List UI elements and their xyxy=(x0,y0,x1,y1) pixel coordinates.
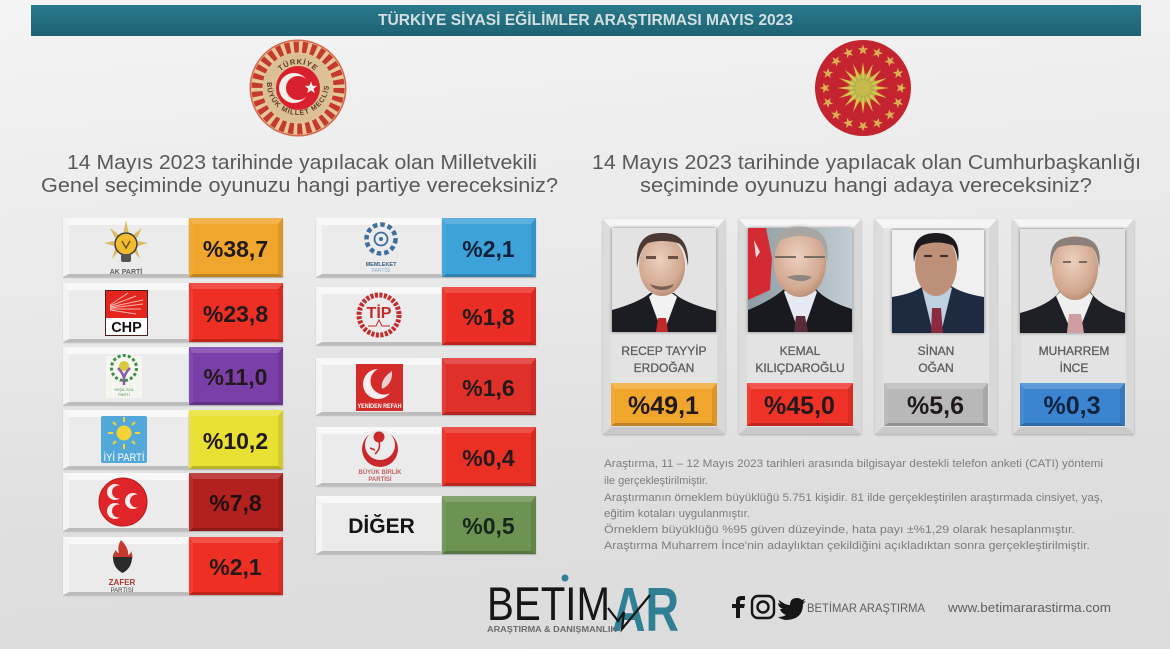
icon: Memleket Partisi logo: MEMLEKET xyxy=(366,262,397,268)
Betimar logo: AR xyxy=(612,576,679,645)
result value xyxy=(884,383,988,426)
icon: Zafer Partisi logo xyxy=(108,540,136,594)
icon: CHP logo xyxy=(105,290,148,336)
panel: party results column 2 xyxy=(316,218,536,556)
candidate name: KEMAL xyxy=(780,344,820,358)
result value: %0,3 xyxy=(1044,392,1100,420)
heading: presidency question: seçiminde oyunuzu hangi adaya vereceksiniz? xyxy=(640,175,1092,197)
result value: %49,1 xyxy=(628,392,699,420)
Betimar logo xyxy=(487,574,679,645)
row: CHP xyxy=(62,283,284,344)
result value xyxy=(747,383,853,426)
icon: Yeşil Sol Parti logo: PARTİ xyxy=(118,392,130,397)
icon: TİP logo: TİP xyxy=(367,304,392,322)
candidate name xyxy=(918,344,954,375)
website address: www.betimararastirma.com xyxy=(947,601,1111,615)
icon: Yeşil Sol Parti logo xyxy=(106,354,142,398)
candidate name: SİNAN xyxy=(918,344,954,358)
methodology note: Araştırma Muharrem İnce'nin adaylıktan çekildiğini açıkladıktan sonra gerçekleştirilmiştir. xyxy=(604,539,1090,552)
row: AK Parti xyxy=(62,218,284,278)
icon: parliament seal xyxy=(250,40,346,136)
row: TİP xyxy=(316,287,536,346)
heading: parliament question: 14 Mayıs 2023 tarihinde yapılacak olan Milletvekili xyxy=(67,152,537,174)
candidate name xyxy=(755,344,845,375)
icon: AK Parti bulb xyxy=(104,220,148,276)
portrait: Oğan xyxy=(890,228,986,336)
row: Zafer Partisi xyxy=(62,537,284,596)
row: Yeşil Sol Parti xyxy=(62,347,284,406)
row: Büyük Birlik Partisi: %0,4 xyxy=(462,444,515,470)
title banner: TÜRKİYE SİYASİ EĞİLİMLER ARAŞTIRMASI MAYIS 2023 xyxy=(378,12,793,29)
candidate name: ERDOĞAN xyxy=(634,361,694,375)
methodology note: Örneklem büyüklüğü %95 güven düzeyinde, hata payı ±%1,29 olarak hesaplanmıştır. xyxy=(604,524,1075,536)
candidate name: KILIÇDAROĞLU xyxy=(755,361,845,375)
methodology note: ile gerçekleştirilmiştir. xyxy=(604,475,708,487)
row: İyi Parti: %10,2 xyxy=(203,428,268,454)
icon: Yeniden Refah logo xyxy=(356,364,403,411)
candidate name xyxy=(621,344,707,375)
portrait: Kılıçdaroğlu xyxy=(746,224,854,334)
icon: Büyük Birlik Partisi logo: PARTİSİ xyxy=(368,476,392,483)
candidate card: Erdoğan xyxy=(603,219,725,434)
heading: parliament question: Genel seçiminde oyunuzu hangi partiye vereceksiniz? xyxy=(41,175,558,197)
portrait: Erdoğan xyxy=(610,226,718,334)
label: Diğer xyxy=(316,496,442,554)
candidate name: RECEP TAYYİP xyxy=(621,344,707,358)
row: AK Parti: %38,7 xyxy=(203,236,268,262)
methodology note xyxy=(604,458,1103,552)
row: Yeşil Sol Parti: %11,0 xyxy=(204,364,267,390)
row: Büyük Birlik Partisi xyxy=(316,427,536,488)
candidate card: Kılıçdaroğlu xyxy=(739,219,861,434)
portrait: İnce xyxy=(1018,226,1127,336)
candidate name: MUHARREM xyxy=(1039,344,1109,358)
icon: instagram xyxy=(752,596,774,618)
row: Yeniden Refah xyxy=(316,358,536,416)
heading: presidency question xyxy=(592,152,1141,197)
candidate card: Oğan xyxy=(875,219,997,434)
result value: %45,0 xyxy=(764,392,835,420)
row: Yeniden Refah: %1,6 xyxy=(462,374,515,400)
result value: %5,6 xyxy=(907,392,964,420)
icon: Büyük Birlik Partisi logo: BÜYÜK BİRLİK xyxy=(358,469,402,476)
icon: Memleket Partisi logo xyxy=(364,222,398,274)
icon: Yeniden Refah logo: YENİDEN REFAH xyxy=(358,403,402,410)
row: Diğer xyxy=(316,496,536,556)
methodology note: Araştırma, 11 – 12 Mayıs 2023 tarihleri arasında bilgisayar destekli telefon anketi (CATI) yöntemi xyxy=(604,458,1103,470)
row: Memleket Partisi xyxy=(316,218,536,278)
social media handle xyxy=(732,594,925,620)
icon: Memleket Partisi logo: PARTİSİ xyxy=(372,267,390,274)
social media handle: BETİMAR ARAŞTIRMA xyxy=(807,601,925,615)
icon: İyi Parti logo xyxy=(101,416,147,464)
icon: Büyük Birlik Partisi logo xyxy=(358,430,402,483)
icon: parliament seal: TÜRKİYE xyxy=(277,58,318,70)
row: Zafer Partisi: %2,1 xyxy=(209,554,262,580)
candidate name xyxy=(1039,344,1109,375)
icon: CHP logo: CHP xyxy=(111,320,142,336)
result value xyxy=(1020,383,1125,426)
icon: AK Parti bulb: AK PARTİ xyxy=(110,268,142,276)
row: MHP xyxy=(62,473,284,532)
icon: İyi Parti logo: İYİ PARTİ xyxy=(104,451,144,464)
icon: Zafer Partisi logo: ZAFER xyxy=(109,578,136,587)
icon: presidency seal xyxy=(815,40,911,136)
methodology note: eğitim kotaları uygulanmıştır. xyxy=(604,508,750,520)
Betimar logo: ARAŞTIRMA & DANIŞMANLIK xyxy=(487,625,617,634)
icon: facebook xyxy=(732,596,745,618)
icon: MHP crescents xyxy=(98,478,148,526)
icon: twitter xyxy=(778,598,806,620)
row: Memleket Partisi: %2,1 xyxy=(462,236,515,262)
candidate name: OĞAN xyxy=(918,361,954,375)
panel: party results column 1 xyxy=(62,218,284,596)
row: MHP: %7,8 xyxy=(209,490,262,516)
label: Diğer: DİĞER xyxy=(348,515,415,538)
row: CHP: %23,8 xyxy=(203,300,268,326)
row: İyi Parti xyxy=(62,410,284,470)
candidate name: İNCE xyxy=(1060,361,1088,375)
row: TİP: %1,8 xyxy=(462,304,515,330)
icon: Zafer Partisi logo: PARTİSİ xyxy=(111,587,134,594)
heading: presidency question: 14 Mayıs 2023 tarihinde yapılacak olan Cumhurbaşkanlığı xyxy=(592,152,1141,174)
panel: presidential candidates xyxy=(602,219,1135,436)
heading: parliament question xyxy=(41,152,558,197)
Betimar logo: BETIM xyxy=(487,577,610,630)
row: Diğer: %0,5 xyxy=(462,513,515,539)
result value xyxy=(611,383,717,426)
icon: Yeşil Sol Parti logo: YEŞİL SOL xyxy=(114,387,135,392)
methodology note: Araştırmanın örneklem büyüklüğü 5.751 kişidir. 81 ilde gerçekleştirilen araştırmada cinsiyet, yaş, xyxy=(604,492,1103,504)
title banner xyxy=(31,5,1141,36)
icon: TİP logo xyxy=(356,292,402,338)
candidate card: İnce xyxy=(1013,219,1134,434)
